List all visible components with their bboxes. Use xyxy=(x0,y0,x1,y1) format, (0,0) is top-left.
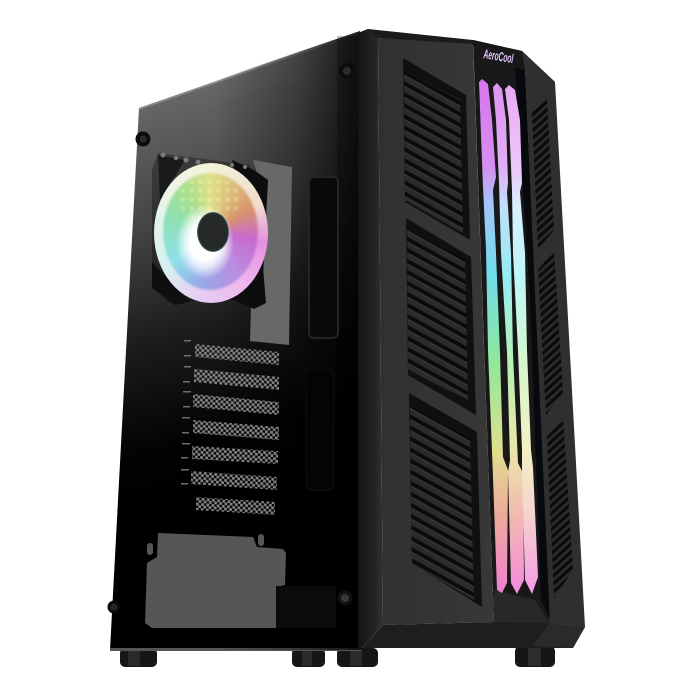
fan outer ring xyxy=(154,163,268,303)
fan mount bracket (grey cut-out) xyxy=(250,160,292,345)
fan blades xyxy=(163,173,258,290)
interior mesh roof xyxy=(205,82,336,130)
RGB fan xyxy=(154,163,268,303)
screw: top left xyxy=(136,132,150,146)
vent: front top xyxy=(403,58,470,240)
vent: front middle xyxy=(406,218,476,415)
screw: bottom right xyxy=(338,590,352,606)
foot: front left xyxy=(337,648,378,667)
LED strip 1 xyxy=(479,79,508,593)
cable cut-out xyxy=(309,177,338,338)
black groove xyxy=(515,68,551,620)
LED lower plate xyxy=(494,590,550,623)
fan frame corner: bottom right xyxy=(225,255,266,309)
vent: front bottom xyxy=(409,393,482,607)
interior right shading xyxy=(215,31,362,650)
LED strip 3 xyxy=(505,85,538,594)
fan frame corner: top right xyxy=(232,160,268,215)
fan hex grille xyxy=(178,177,240,221)
bottom bevel xyxy=(362,622,585,648)
fan hub xyxy=(197,212,229,252)
case body: front xyxy=(358,29,585,648)
lower cable cut-out xyxy=(306,368,334,490)
logo: AeroCool: AeroCool xyxy=(482,46,515,66)
LED centre strip xyxy=(473,40,550,623)
glass side panel xyxy=(110,31,362,651)
fan frame corner: bottom left xyxy=(152,262,190,305)
vent: right bottom xyxy=(547,417,573,598)
screw: top right xyxy=(339,63,355,79)
LED strip 2 xyxy=(493,83,524,594)
screw: bottom left xyxy=(108,600,120,614)
PCI slot tabs xyxy=(181,340,191,484)
vent holes above fan xyxy=(160,152,247,169)
PCI slot perforation rows xyxy=(191,344,279,515)
PSU mounting slots xyxy=(147,534,264,555)
fan frame corner: top left xyxy=(158,155,185,200)
PSU box xyxy=(276,586,336,628)
fan frame shadow xyxy=(152,153,262,302)
foot: front right xyxy=(515,646,555,667)
RGB LED strips xyxy=(479,79,538,594)
fan hub glow xyxy=(176,205,234,279)
top bevel xyxy=(358,29,555,82)
vent: right top xyxy=(532,98,554,250)
PSU cut-out xyxy=(145,533,286,628)
right panel xyxy=(522,51,585,627)
vent: right middle xyxy=(538,250,563,415)
foot: rear right xyxy=(292,648,325,667)
corner pillar xyxy=(358,29,383,648)
foot: rear left xyxy=(120,648,157,667)
main front panel xyxy=(378,38,494,625)
